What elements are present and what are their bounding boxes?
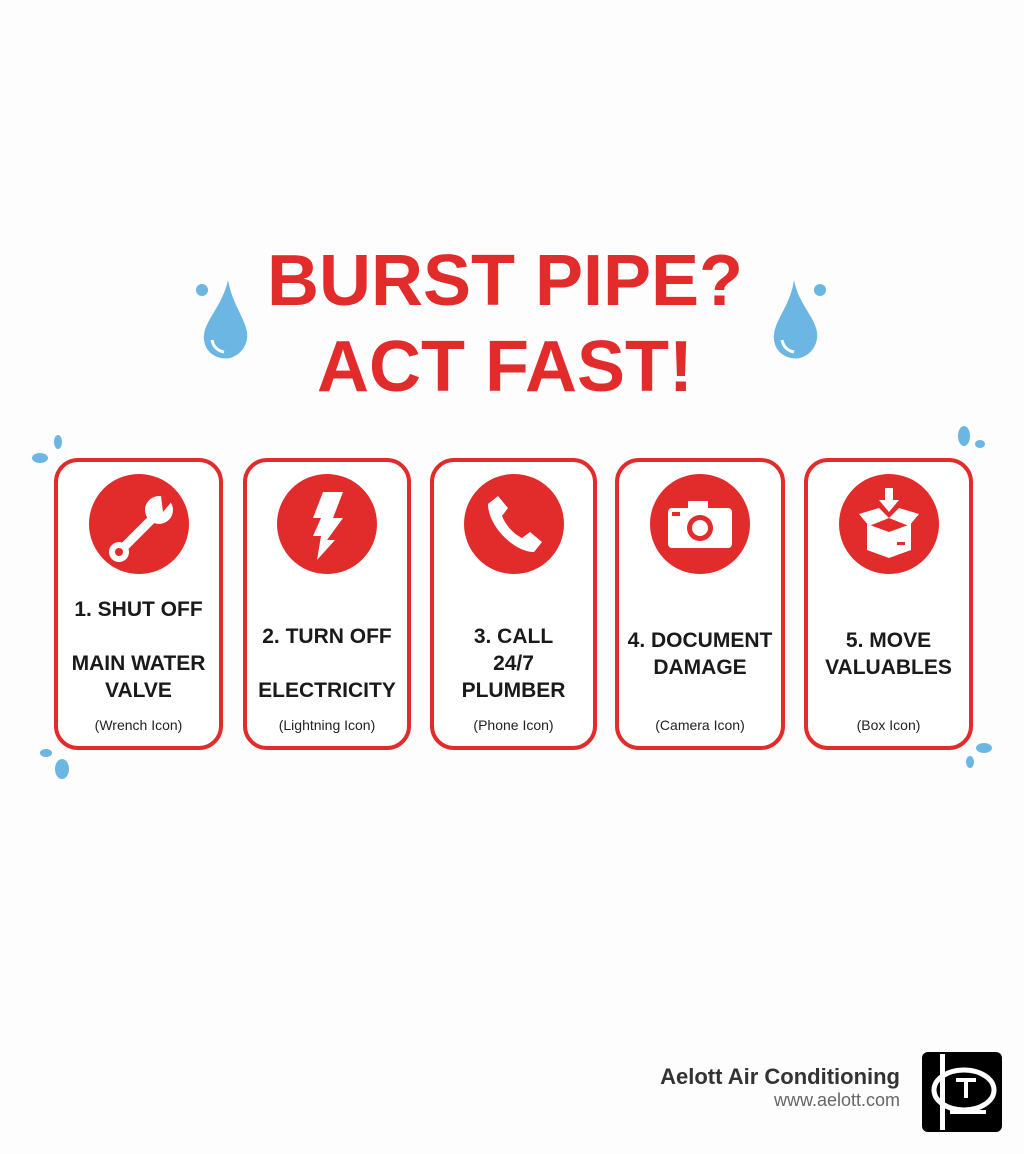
panel: step 2 — [243, 458, 411, 750]
text: 3. CALL — [474, 625, 553, 648]
text: VALUABLES — [825, 656, 952, 679]
icon: water drop left — [196, 280, 248, 358]
panel: step 4: (Camera Icon) — [655, 717, 745, 733]
panel: step 4 — [615, 458, 785, 750]
title — [267, 241, 743, 407]
icon: box — [838, 474, 938, 574]
panel: step 1 — [54, 458, 223, 750]
text: DAMAGE — [653, 656, 747, 679]
icon: lightning — [277, 474, 377, 574]
splash drops — [32, 435, 62, 463]
panel: step 5 — [804, 458, 973, 750]
text: PLUMBER — [462, 679, 565, 702]
icon: water drop right — [774, 280, 826, 358]
panel: step 3 — [430, 458, 597, 750]
text — [628, 629, 772, 679]
text — [825, 629, 952, 679]
text: MAIN WATER — [72, 652, 205, 675]
footer brand text: www.aelott.com — [774, 1090, 900, 1110]
footer brand text: Aelott Air Conditioning — [660, 1064, 900, 1089]
panel: step 3: (Phone Icon) — [473, 717, 554, 733]
text — [462, 625, 565, 702]
panel: step 5: (Box Icon) — [857, 717, 920, 733]
title: BURST PIPE? — [267, 241, 743, 321]
footer brand text — [660, 1064, 900, 1110]
text: 5. MOVE — [846, 629, 931, 652]
icon: camera — [650, 474, 750, 574]
text: 1. SHUT OFF — [74, 598, 203, 621]
icon: wrench — [88, 474, 188, 574]
panel: step 1: (Wrench Icon) — [95, 717, 182, 733]
text: 24/7 — [493, 652, 534, 675]
text — [258, 625, 396, 702]
panel: step 2: (Lightning Icon) — [279, 717, 375, 733]
text — [72, 598, 205, 702]
text: 4. DOCUMENT — [628, 629, 772, 652]
text: VALVE — [105, 679, 172, 702]
title: ACT FAST! — [317, 327, 693, 407]
icon: phone — [464, 474, 564, 574]
text: 2. TURN OFF — [262, 625, 392, 648]
text: ELECTRICITY — [258, 679, 396, 702]
logo — [922, 1052, 1002, 1132]
